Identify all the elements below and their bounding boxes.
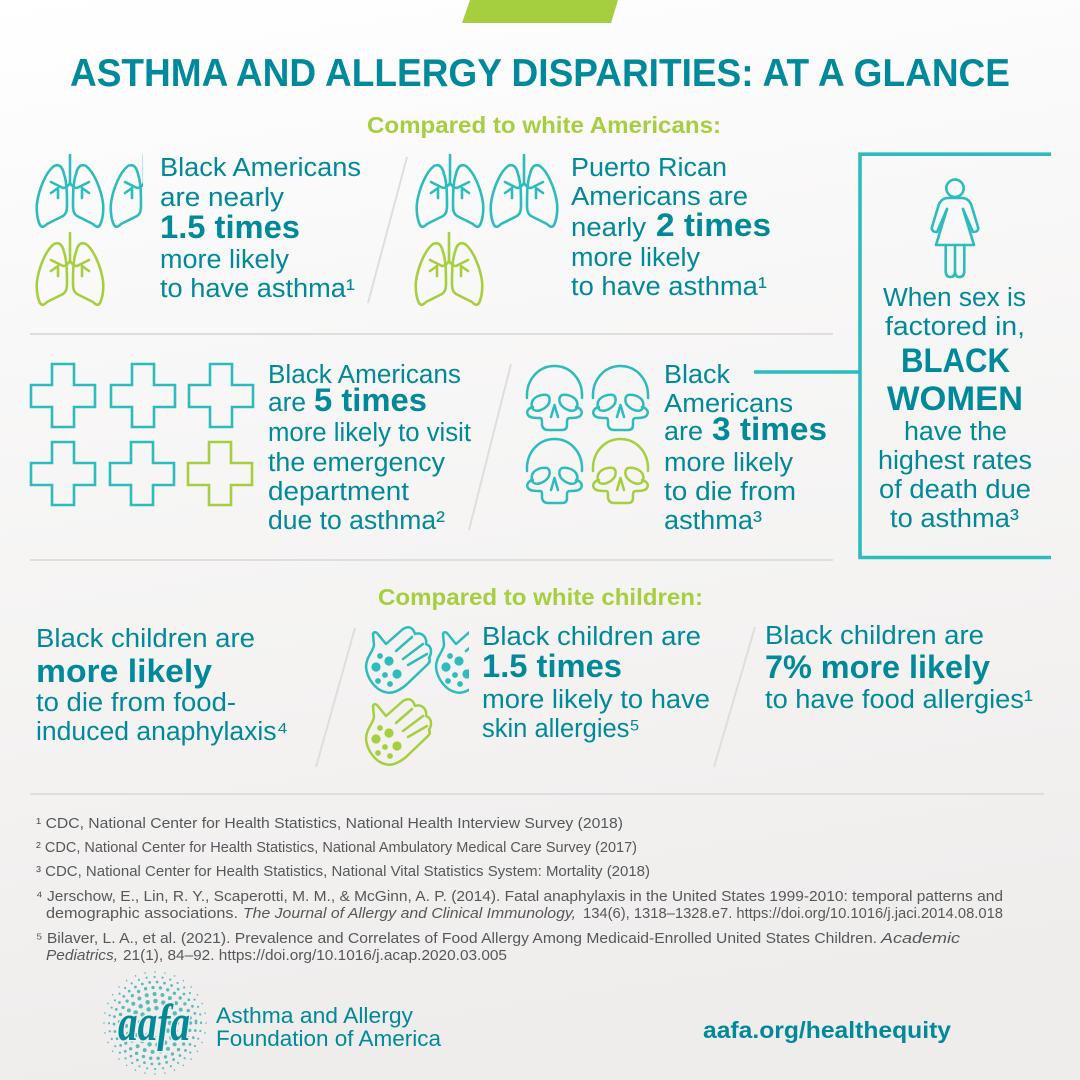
footnotes: demographic associations.	[46, 906, 238, 922]
text: Black women highest rates: When sex is	[883, 284, 1026, 312]
text: Black women highest rates: to asthma³	[890, 505, 1019, 533]
icon: woman	[932, 180, 978, 277]
text: Black women highest rates	[878, 284, 1032, 533]
panel: anaphylaxis: to die from food-	[36, 689, 236, 717]
footnotes: 21(1), 84–92. https://doi.org/10.1016/j.acap.2020.03.005	[123, 948, 507, 964]
footnotes: 134(6), 1318–1328.e7. https://doi.org/10.1016/j.jaci.2014.08.018	[583, 906, 1003, 922]
footnotes	[36, 816, 1003, 964]
logo wordmark: Foundation of America	[216, 1026, 441, 1051]
icon: three lungs, one highlighted	[416, 155, 557, 305]
icon: six crosses, one highlighted	[31, 364, 253, 505]
text: Black Americans 1.5 times: to have asthma¹	[160, 275, 355, 303]
text: Black women highest rates: BLACK	[901, 342, 1010, 380]
footnotes: ² CDC, National Center for Health Statistics, National Ambulatory Medical Care Survey (2017)	[36, 840, 637, 856]
text: Puerto Rican Americans 2 times: to have asthma¹	[571, 273, 767, 301]
text: 5 times emergency department: Black Americans	[268, 361, 461, 389]
icon: three hands with rash, one highlighted	[364, 626, 469, 766]
logo wordmark	[216, 1003, 441, 1051]
footnotes: Pediatrics,	[46, 948, 118, 964]
text: Puerto Rican Americans 2 times: nearly	[571, 214, 646, 242]
text: Black women highest rates: of death due	[879, 476, 1031, 504]
top green tab	[462, 0, 618, 23]
text: Puerto Rican Americans 2 times: 2 times	[656, 207, 771, 243]
text: Black women highest rates: highest rates	[878, 447, 1032, 475]
text: 5 times emergency department: the emergency	[268, 449, 445, 477]
text: 3 times die from asthma: are	[664, 418, 703, 446]
panel: anaphylaxis: more likely	[36, 653, 212, 689]
panel: food allergies: 7% more likely	[765, 649, 990, 685]
panel: anaphylaxis: Black children are	[36, 625, 255, 653]
footnotes: ⁵ Bilaver, L. A., et al. (2021). Prevalence and Correlates of Food Allergy Among Medicaid-Enrolled United States Children.	[36, 931, 877, 947]
panel: Puerto Rican Americans asthma	[416, 154, 771, 305]
text: 1.5 times skin allergies: more likely to have	[482, 686, 710, 714]
logo wordmark: Asthma and Allergy	[216, 1003, 414, 1028]
text: 3 times die from asthma: Black	[664, 361, 730, 389]
text: 1.5 times skin allergies: Black children are	[482, 623, 701, 651]
footnotes: ⁴ Jerschow, E., Lin, R. Y., Scaperotti, M. M., & McGinn, A. P. (2014). Fatal anaphylaxis in the United States 1999-2010: temporal patterns and	[36, 889, 1003, 905]
subheading: children: Compared to white children:	[378, 584, 703, 610]
website link: aafa.org/healthequity	[703, 1017, 951, 1043]
text: 1.5 times skin allergies	[482, 623, 710, 743]
text: Puerto Rican Americans 2 times	[571, 154, 771, 301]
text: 5 times emergency department	[268, 361, 471, 535]
text: 3 times die from asthma: 3 times	[712, 411, 827, 447]
text: 5 times emergency department: are	[268, 389, 306, 417]
panel: emergency department visits	[31, 361, 471, 535]
text: Black Americans 1.5 times: are nearly	[160, 184, 284, 212]
callout bracket and connector	[754, 154, 1051, 557]
text: Black women highest rates: have the	[904, 418, 1007, 446]
text: 5 times emergency department: due to asthma²	[268, 507, 445, 535]
text: 1.5 times skin allergies: 1.5 times	[482, 648, 622, 684]
text: Black women highest rates: factored in,	[885, 313, 1025, 341]
text: Black Americans 1.5 times: 1.5 times	[160, 209, 300, 245]
panel: anaphylaxis	[36, 625, 288, 746]
footnotes: ³ CDC, National Center for Health Statistics, National Vital Statistics System: Mortality (2018)	[36, 864, 650, 880]
text: 3 times die from asthma	[664, 361, 827, 535]
text: 3 times die from asthma: more likely	[664, 449, 793, 477]
text: 5 times emergency department: 5 times	[314, 382, 427, 418]
text: 1.5 times skin allergies: skin allergies⁵	[482, 715, 640, 743]
panel: food allergies	[765, 622, 1033, 714]
panel: death from asthma	[527, 361, 827, 535]
text: Black Americans 1.5 times	[160, 154, 361, 303]
text: Puerto Rican Americans 2 times: Puerto Rican	[571, 154, 727, 182]
text: Black women highest rates: WOMEN	[887, 380, 1023, 418]
text: 3 times die from asthma: asthma³	[664, 507, 762, 535]
text: Puerto Rican Americans 2 times: more likely	[571, 244, 700, 272]
panel: food allergies: Black children are	[765, 622, 984, 650]
icon: three lungs, one highlighted	[35, 154, 143, 306]
panel: skin allergies	[366, 623, 710, 765]
text: 3 times die from asthma: Americans	[664, 390, 793, 418]
text: 5 times emergency department: more likely to visit	[268, 419, 471, 447]
icon: four skulls, one highlighted	[527, 366, 648, 503]
subheading: adults: Compared to white Americans:	[367, 112, 721, 138]
text: 5 times emergency department: department	[268, 478, 409, 506]
footnotes: ¹ CDC, National Center for Health Statistics, National Health Interview Survey (2018)	[36, 816, 623, 832]
text: Puerto Rican Americans 2 times: Americans are	[571, 183, 748, 211]
panel: food allergies: to have food allergies¹	[765, 686, 1033, 714]
panel: anaphylaxis: induced anaphylaxis⁴	[36, 718, 288, 746]
footnotes: The Journal of Allergy and Clinical Immunology,	[243, 906, 576, 922]
title: ASTHMA AND ALLERGY DISPARITIES: AT A GLANCE	[70, 52, 1010, 95]
logo mark: aafa lettering: aafa	[118, 995, 190, 1052]
footnotes: Academic	[880, 931, 961, 947]
callout: Black women	[754, 154, 1051, 557]
text: 3 times die from asthma: to die from	[664, 478, 796, 506]
text: Black Americans 1.5 times: Black Americans	[160, 154, 361, 182]
logo: AAFA	[104, 972, 441, 1074]
text: Black Americans 1.5 times: more likely	[160, 246, 289, 274]
panel: Black Americans asthma	[37, 154, 361, 305]
logo mark: dotted burst	[104, 972, 206, 1074]
